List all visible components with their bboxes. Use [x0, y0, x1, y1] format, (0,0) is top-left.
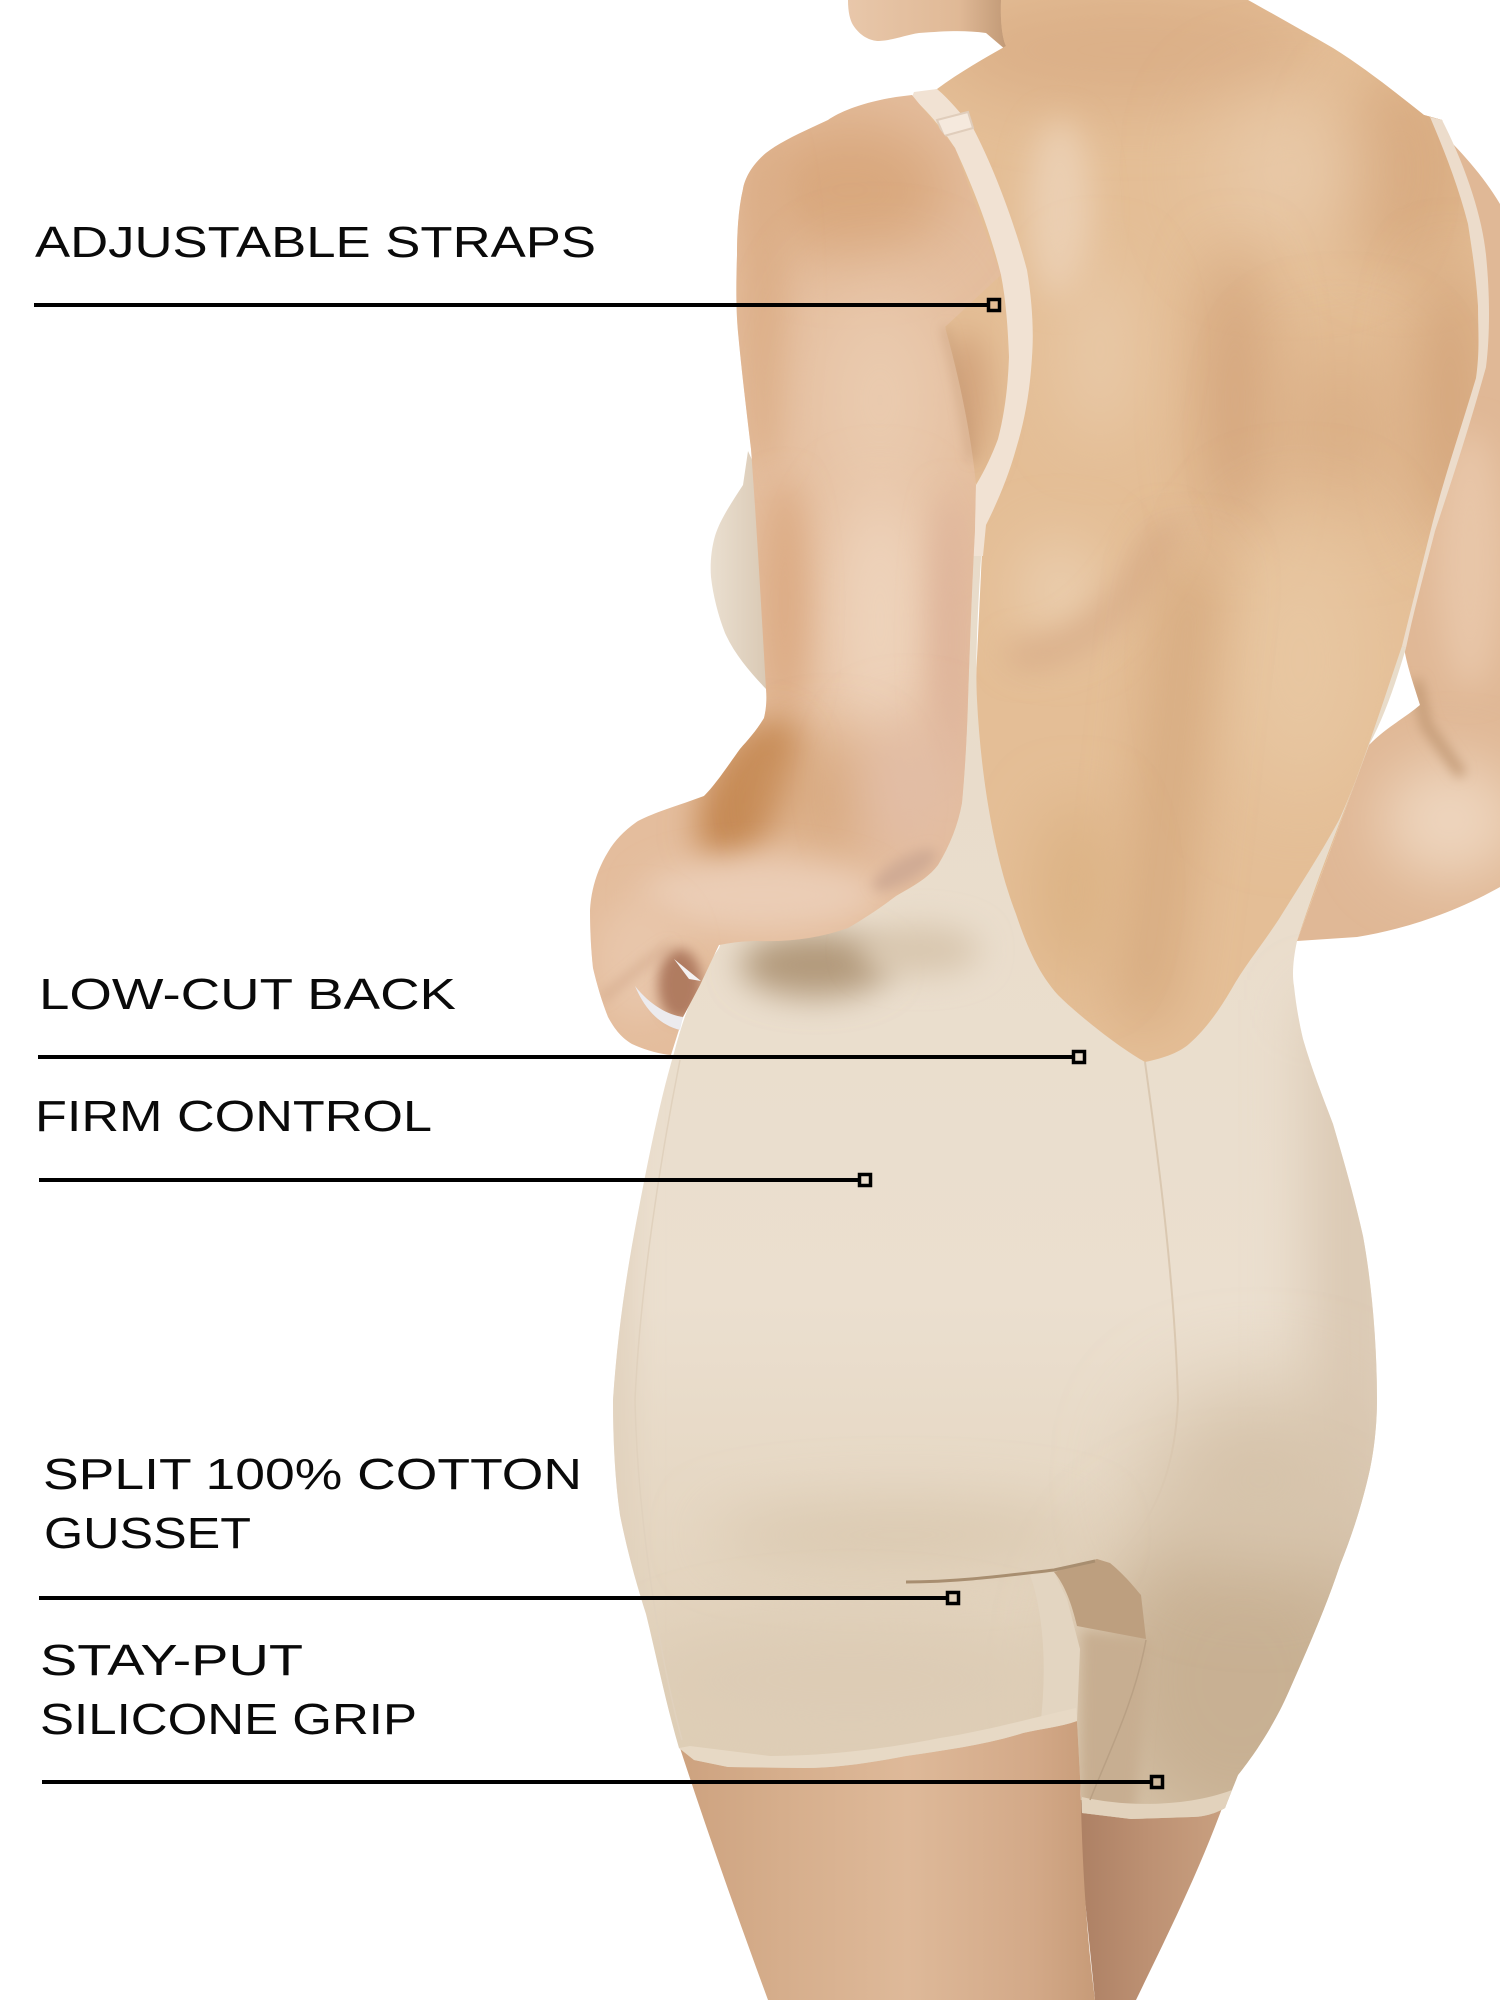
leader line	[42, 1780, 1151, 1784]
model figure	[580, 0, 1500, 2000]
label line two: GUSSET	[44, 1509, 251, 1558]
label: FIRM CONTROL	[35, 1092, 432, 1141]
near leg shorts side band	[1030, 1572, 1080, 1728]
callout: split cotton gusset	[39, 1450, 958, 1604]
label line two: SILICONE GRIP	[40, 1695, 417, 1744]
gap between wrist and finger	[674, 959, 701, 981]
callout: firm control	[35, 1092, 870, 1186]
shorts hem far leg	[1082, 1790, 1232, 1819]
right strap	[1402, 117, 1489, 648]
gluteal fold	[906, 1561, 1095, 1582]
side seam	[635, 1060, 682, 1740]
callout: adjustable straps	[34, 218, 1000, 310]
strap adjuster	[937, 112, 973, 136]
gaps between fingers	[635, 986, 683, 1030]
marker	[860, 1174, 870, 1186]
chin	[848, 0, 1006, 50]
gusset	[1054, 1559, 1146, 1639]
label: ADJUSTABLE STRAPS	[35, 218, 596, 267]
marker	[1152, 1776, 1162, 1788]
centre back seam	[1115, 1062, 1178, 1560]
label line one: STAY-PUT	[40, 1636, 303, 1685]
back skin	[900, 0, 1500, 1100]
near leg	[679, 1715, 1095, 2000]
leader line	[39, 1596, 947, 1600]
label: LOW-CUT BACK	[39, 970, 456, 1019]
label line one: SPLIT 100% COTTON	[43, 1450, 582, 1499]
shadow beneath forearm	[740, 933, 890, 997]
callout: stay-put silicone grip	[40, 1636, 1162, 1788]
far arm	[1290, 100, 1500, 960]
shorts hem near leg	[679, 1708, 1077, 1768]
near arm crease	[945, 327, 972, 460]
leader line	[38, 1055, 1073, 1059]
inner leg seam	[1090, 1640, 1146, 1800]
marker	[1074, 1052, 1084, 1062]
left strap	[912, 89, 1033, 556]
marker	[948, 1592, 958, 1604]
callout: low-cut back	[38, 970, 1084, 1062]
marker	[988, 300, 1000, 310]
scapula crease	[1010, 520, 1170, 655]
bodysuit	[600, 530, 1406, 1850]
bust	[711, 451, 770, 689]
near arm	[580, 80, 1020, 1070]
inner thigh shading	[1078, 1628, 1140, 1806]
leader line	[39, 1178, 859, 1182]
leader line	[34, 303, 989, 307]
far leg	[1075, 1800, 1225, 2000]
